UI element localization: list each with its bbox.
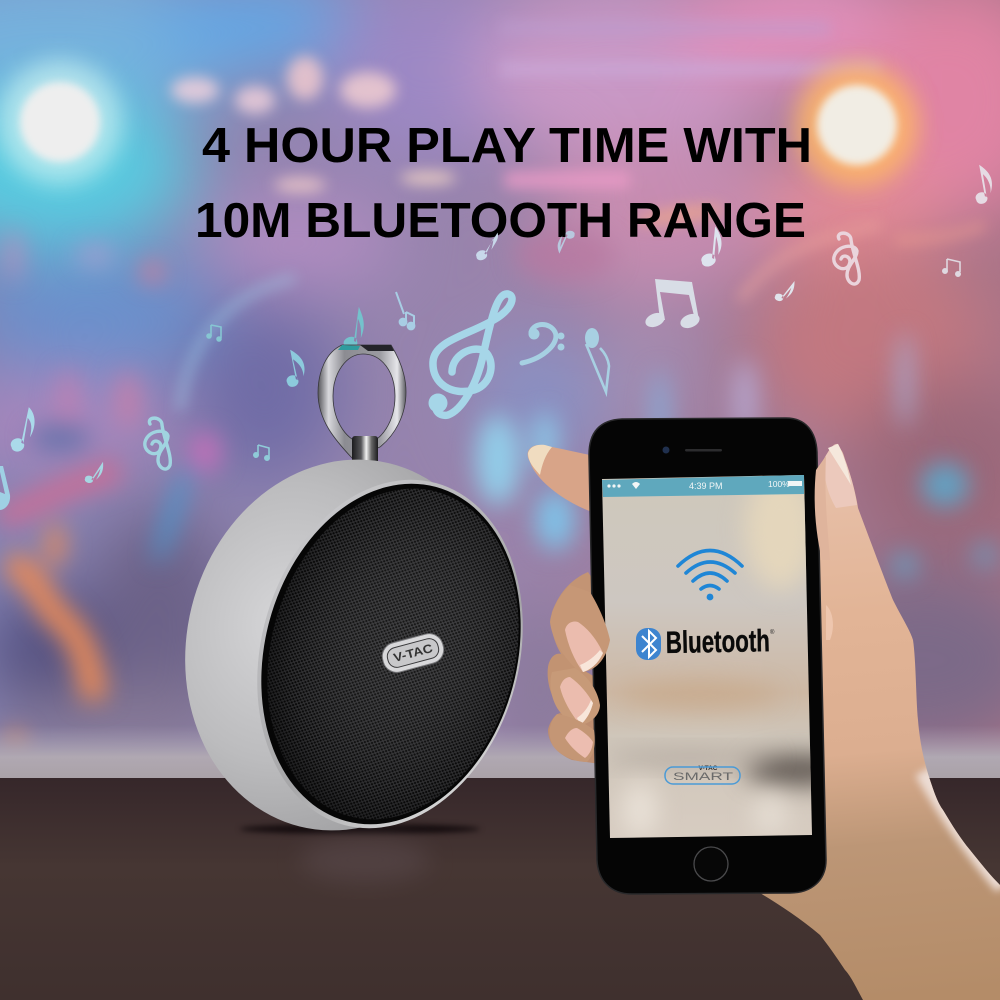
wall band at floor line xyxy=(0,725,1000,778)
title: 4 HOUR PLAY TIME WITH xyxy=(202,119,812,173)
speaker xyxy=(146,345,560,865)
tilted note right xyxy=(773,277,798,305)
bass clef xyxy=(522,324,564,363)
phone camera and speaker xyxy=(662,446,722,454)
floor xyxy=(0,778,1000,1000)
tilted note left xyxy=(83,458,107,487)
Bluetooth wordmark: Bluetooth xyxy=(666,623,770,660)
phone screen xyxy=(602,475,812,838)
note behind ring xyxy=(344,307,364,349)
icon: wifi xyxy=(678,550,742,600)
phone status bar xyxy=(602,475,804,497)
V-TAC Smart logo: V-TAC xyxy=(698,765,718,772)
icon: small treble clef right xyxy=(834,233,859,284)
speaker V-TAC badge: V-TAC xyxy=(392,641,434,665)
V-TAC Smart logo: SMART xyxy=(673,771,733,783)
icon: large treble clef xyxy=(428,294,512,415)
eighth note left of ring xyxy=(287,350,305,387)
speaker body xyxy=(146,425,544,865)
speaker shadow xyxy=(240,824,480,834)
middle finger xyxy=(550,585,610,672)
beamed notes small xyxy=(207,325,221,341)
title xyxy=(195,119,812,248)
speaker V-TAC badge xyxy=(379,630,447,676)
speaker ring post xyxy=(352,436,378,465)
icon: bluetooth logo xyxy=(636,628,661,660)
speaker reflection xyxy=(300,838,430,882)
speaker grille xyxy=(232,460,554,848)
Bluetooth wordmark: ® xyxy=(770,629,775,636)
notes centre top xyxy=(476,233,498,260)
hand behind phone xyxy=(528,440,1000,1000)
inverted note xyxy=(585,328,609,392)
edge note xyxy=(0,466,10,510)
eighth note far left xyxy=(11,407,35,452)
music notes xyxy=(0,165,992,510)
phone status bar: 100% xyxy=(768,479,790,489)
blurred concert background xyxy=(0,0,1000,780)
little finger xyxy=(550,714,595,762)
icon: small treble clef left xyxy=(145,418,170,469)
phone home button xyxy=(694,847,728,881)
title: 10M BLUETOOTH RANGE xyxy=(195,194,806,248)
right thumb nail and finger tips xyxy=(815,444,857,640)
speaker ring handle xyxy=(318,345,406,458)
note far right xyxy=(976,165,992,204)
phone status bar: 4:39 PM xyxy=(689,481,723,491)
speaker rim xyxy=(220,450,560,858)
left fingers with nails xyxy=(528,445,610,762)
index finger tip xyxy=(528,445,552,475)
big beamed notes xyxy=(643,279,702,331)
ring finger xyxy=(550,668,600,725)
phone xyxy=(589,418,855,894)
V-TAC Smart logo xyxy=(665,765,740,784)
